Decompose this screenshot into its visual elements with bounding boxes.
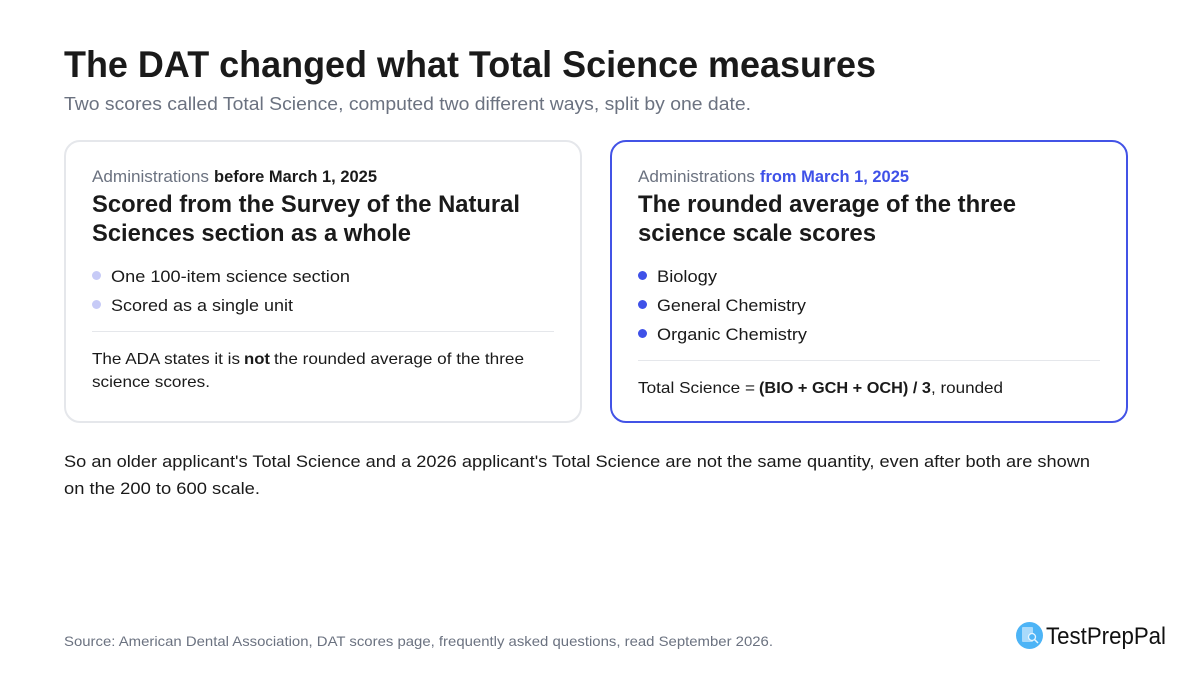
source: Source: American Dental Association, DAT scores page, frequently asked questions, read September 2026. (64, 633, 773, 649)
panel note: The ADA states it is (92, 351, 240, 368)
subtitle: Two scores called Total Science, computed two different ways, split by one date. (64, 94, 751, 114)
bullet list: General Chemistry (657, 296, 807, 315)
bullet list: Scored as a single unit (111, 296, 293, 315)
bullet list (92, 267, 350, 315)
bullet list: Organic Chemistry (657, 325, 808, 344)
panel label (638, 167, 909, 186)
panel heading (92, 191, 520, 247)
conclusion text: So an older applicant's Total Science and a 2026 applicant's Total Science are not the same quantity, even after both are shown (64, 452, 1090, 471)
formula (638, 380, 1003, 397)
panel heading: Sciences section as a whole (92, 220, 411, 247)
formula: , rounded (931, 380, 1003, 397)
conclusion text (64, 452, 1090, 498)
bullet list: Biology (657, 267, 718, 286)
panel heading: Scored from the Survey of the Natural (92, 191, 520, 218)
logo: TestPrepPal: TestPrepPal (1046, 623, 1166, 650)
icon: document with magnifier (1016, 622, 1043, 649)
bullet list (638, 267, 808, 344)
panel note: science scores. (92, 374, 210, 391)
panel heading (638, 191, 1016, 247)
panel: from March 1, 2025 (611, 141, 1127, 422)
bullet list: One 100-item science section (111, 267, 350, 286)
panel heading: The rounded average of the three (638, 191, 1016, 218)
conclusion text: on the 200 to 600 scale. (64, 479, 260, 498)
panel label: from March 1, 2025 (760, 167, 909, 186)
panel label: Administrations (638, 167, 755, 186)
formula: Total Science = (638, 380, 755, 397)
panel note: not (244, 351, 271, 368)
panel heading: science scale scores (638, 220, 876, 247)
panel note: the rounded average of the three (274, 351, 524, 368)
panel note (92, 351, 524, 391)
panel: before March 1, 2025 (65, 141, 581, 422)
panel label (92, 167, 377, 186)
formula: (BIO + GCH + OCH) / 3 (759, 380, 931, 397)
title: The DAT changed what Total Science measures (64, 44, 876, 85)
panel label: Administrations (92, 167, 209, 186)
panel label: before March 1, 2025 (214, 167, 377, 186)
